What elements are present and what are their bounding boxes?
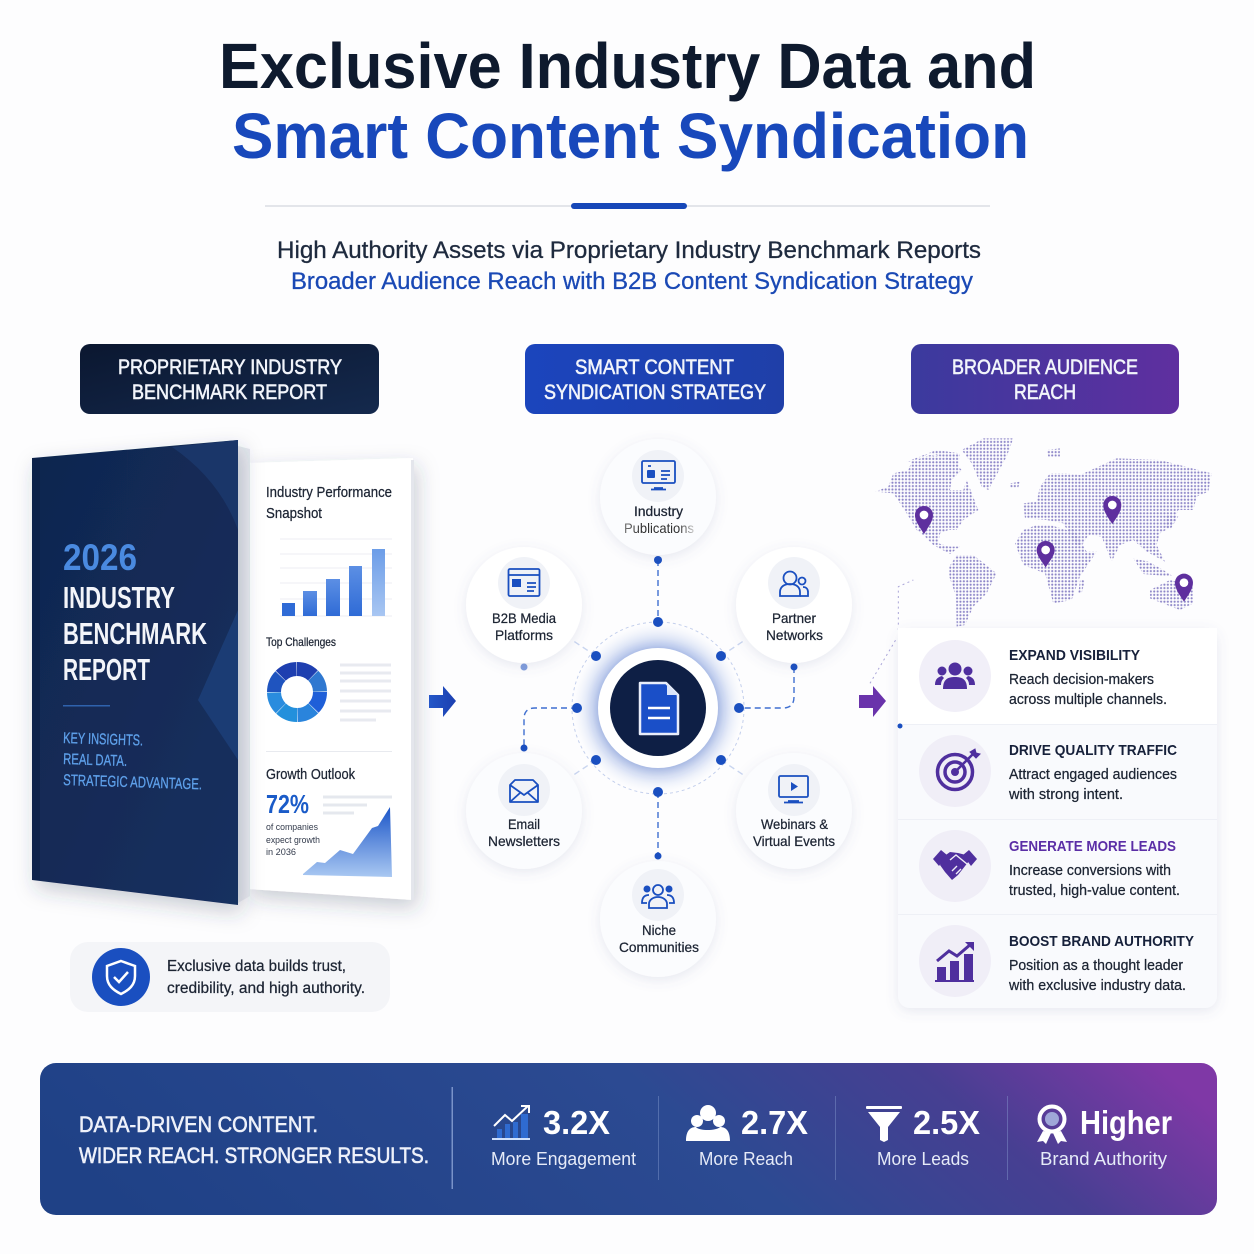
heading: syndication strategy: SYNDICATION STRATEGY [544,381,766,404]
benefit: boost brand authority [919,925,1194,997]
bar chart [280,539,392,616]
heading: broader reach: BROADER AUDIENCE [952,356,1138,379]
page heading: growth outlook: Growth Outlook [266,766,355,783]
benefit: drive quality traffic [919,735,1177,807]
page heading: snapshot [266,484,392,522]
stat: engagement: 3.2X [543,1104,610,1141]
node: webinars [736,753,852,869]
heading: broader reach: REACH [1014,381,1076,404]
node: partner networks [736,547,852,663]
title [219,30,1036,172]
benefit: generate more leads: Increase conversions with [1009,863,1171,879]
node: niche communities: Niche [642,922,676,938]
benefit: drive quality traffic: Attract engaged audiences [1009,767,1177,783]
benefits panel [898,628,1217,1008]
callout: exclusive data [70,942,390,1012]
report cover: KEY INSIGHTS. [63,730,143,750]
connector lines [524,560,794,855]
stat: reach: 2.7X [741,1104,808,1141]
page heading: top challenges: Top Challenges [266,635,336,649]
benefit: boost brand authority: with exclusive industry data. [1008,978,1186,994]
callout: exclusive data: Exclusive data builds trust, [167,958,346,975]
benefit: generate more leads [919,830,1180,902]
stat: leads: More Leads [877,1149,969,1169]
hub nodes [520,556,798,860]
node: industry publications: Publications [624,520,694,536]
report cover: 2026 [63,537,137,578]
band tagline: DATA-DRIVEN CONTENT. [79,1112,318,1137]
title: Smart Content Syndication [232,100,1029,172]
icon: document [640,683,678,734]
band tagline: WIDER REACH. STRONGER RESULTS. [79,1143,429,1168]
node: partner networks: Partner [772,610,816,626]
node: b2b media [466,547,582,663]
report cover: STRATEGIC ADVANTAGE. [63,772,202,793]
area chart [303,807,392,877]
world map [870,438,1212,683]
benefit: boost brand authority: Position as a thought leader [1009,958,1183,974]
stat: 72 percent: of companies [266,822,318,833]
donut chart [264,659,330,725]
arrow: report to syndication [429,686,456,717]
node: email newsletters: Newsletters [488,833,560,849]
page heading: snapshot: Snapshot [266,505,323,522]
node: partner networks: Networks [766,627,823,643]
benefit: drive quality traffic: DRIVE QUALITY TRAFFIC [1009,742,1177,759]
stat: 72 percent [266,789,320,858]
stat: 72 percent: in 2036 [266,847,296,858]
stat: 72 percent: 72% [266,789,309,819]
stat: reach: More Reach [699,1149,793,1169]
stat: leads [866,1104,980,1169]
report cover: INDUSTRY [63,580,175,615]
report cover [32,440,238,905]
report cover: BENCHMARK [63,616,207,651]
stat: 72 percent: expect growth [266,835,320,846]
band tagline [79,1112,429,1168]
heading: broader reach [911,344,1179,414]
subtitle: Broader Audience Reach with B2B Content Syndication Strategy [291,268,973,295]
map continents [875,438,1212,627]
callout: exclusive data: credibility, and high authority. [167,980,365,997]
subtitle: High Authority Assets via Proprietary Industry Benchmark Reports [277,237,981,264]
benefit: generate more leads: GENERATE MORE LEADS [1009,838,1176,855]
stat: engagement: More Engagement [491,1149,636,1169]
node: b2b media: B2B Media [492,610,556,626]
benefit: expand visibility [919,640,1167,712]
heading: syndication strategy: SMART CONTENT [575,356,734,379]
node: b2b media: Platforms [495,627,553,643]
stat: authority [1037,1104,1172,1169]
node: webinars: Virtual Events [753,833,835,849]
benefit: boost brand authority: BOOST BRAND AUTHORITY [1009,933,1194,950]
open report page [238,446,414,903]
report cover: REPORT [63,652,150,687]
benefit: drive quality traffic: with strong intent. [1008,787,1123,803]
stat: engagement [491,1104,636,1169]
heading: syndication strategy [525,344,784,414]
stat: authority: Brand Authority [1040,1149,1167,1169]
subtitle [277,237,981,295]
node: email newsletters [466,753,582,869]
heading: proprietary report [80,344,379,414]
node: industry publications [600,439,716,555]
map pins [915,496,1193,602]
benefit: expand visibility: across multiple channels. [1009,692,1167,708]
arrow: syndication to reach [859,686,886,717]
heading: proprietary report: PROPRIETARY INDUSTRY [118,356,342,379]
node: webinars: Webinars & [761,816,829,832]
title: Exclusive Industry Data and [219,30,1036,102]
benefit: expand visibility: Reach decision-makers [1009,672,1154,688]
stat: leads: 2.5X [913,1104,980,1141]
report cover: REAL DATA. [63,751,127,770]
node: niche communities: Communities [619,939,699,955]
hub [520,556,798,860]
node: niche communities [600,861,716,977]
node: industry publications: Industry [634,503,683,519]
benefit: generate more leads: trusted, high-value content. [1009,883,1180,899]
stat: reach [686,1104,808,1169]
node: email newsletters: Email [508,816,540,832]
results band [40,1063,1217,1215]
stat: authority: Higher [1080,1104,1172,1141]
page heading: snapshot: Industry Performance [266,484,392,501]
heading: proprietary report: BENCHMARK REPORT [132,381,327,404]
benefit: expand visibility: EXPAND VISIBILITY [1009,647,1140,664]
